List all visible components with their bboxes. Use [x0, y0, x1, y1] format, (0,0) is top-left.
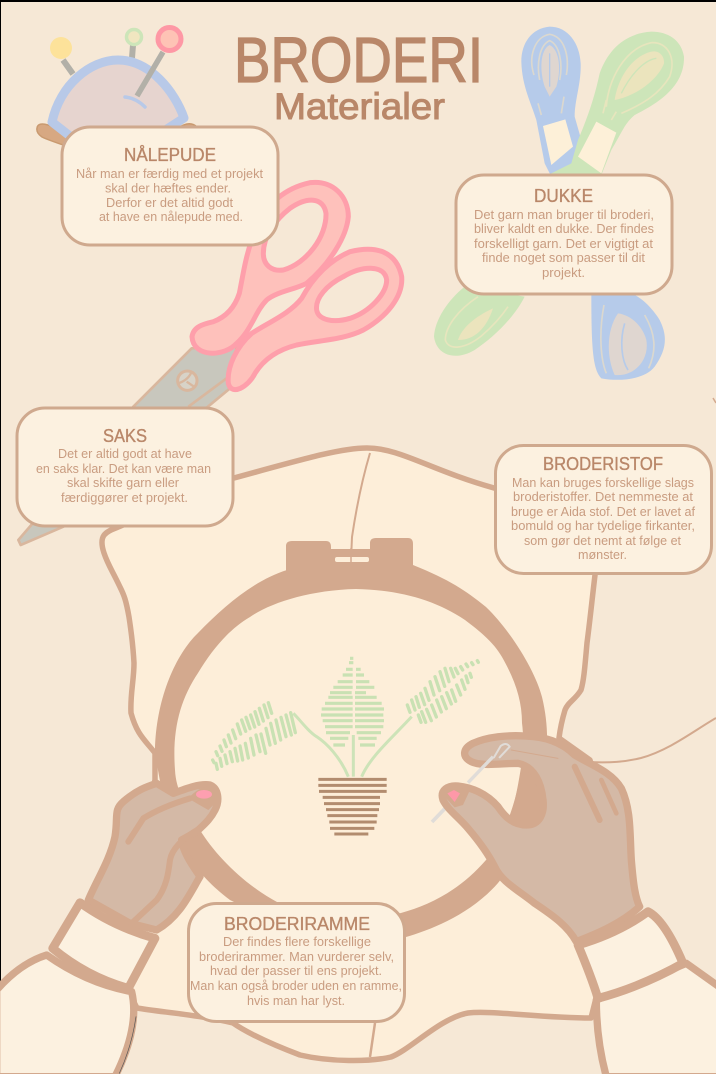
- panel: nålepude: [62, 127, 278, 245]
- text: broderistof description: bomuld og har tydelige firkanter,: [511, 519, 695, 533]
- pink fingernail: [447, 790, 460, 802]
- yellow pin: [63, 60, 73, 74]
- right sleeve: [596, 963, 716, 1074]
- panel: saks: [17, 408, 233, 526]
- centre leaf: [321, 658, 384, 745]
- illustration: pincushion: [37, 28, 197, 148]
- left hand: [88, 783, 218, 930]
- text: saks description: [36, 447, 211, 505]
- text: broderistof description: mønster.: [578, 548, 627, 562]
- right hand: [442, 736, 640, 942]
- heading: saks: SAKS: [103, 426, 147, 446]
- heading: broderiramme: BRODERIRAMME: [224, 914, 370, 934]
- blue skein bottom: [591, 295, 665, 380]
- illustration: left hand with cuff and sleeve: [0, 783, 218, 1074]
- heading: broderistof: BRODERISTOF: [543, 454, 663, 474]
- panel: broderistof: [496, 446, 712, 574]
- text: dukke description: forskelligt garn. Det er vigtigt at: [474, 237, 654, 251]
- text: saks description: skal skifte garn eller: [67, 476, 179, 490]
- illustration: embroidery hoop: [155, 538, 547, 942]
- right cuff: [578, 912, 683, 998]
- text: broderiramme description: Man kan også broder uden en ramme,: [190, 979, 402, 993]
- title: Broderi: BRODERI: [234, 24, 483, 96]
- panel: broderiramme: [188, 904, 404, 1022]
- scissor blades: [18, 347, 237, 545]
- title: [234, 24, 483, 127]
- heading: dukke: DUKKE: [534, 186, 593, 206]
- scissor handles: [192, 182, 402, 390]
- illustration: embroidery floss skeins: [434, 27, 684, 380]
- text: dukke description: [474, 208, 654, 280]
- text: broderistof description: som gør det nemt at følge et: [524, 534, 682, 548]
- needle tip: [432, 806, 447, 822]
- heading: nålepude: NÅLEPUDE: [124, 145, 216, 165]
- left frond: [213, 703, 295, 769]
- text: dukke description: projekt.: [542, 266, 585, 280]
- scissor screw: [178, 371, 197, 390]
- text: saks description: Det er altid godt at have: [58, 447, 192, 461]
- text: dukke description: bliver kaldt en dukke. Der findes: [474, 222, 654, 236]
- text: broderiramme description: broderirammer. Man vurderer selv,: [199, 950, 394, 964]
- cushion base: [37, 124, 197, 148]
- text: dukke description: Det garn man bruger til broderi,: [474, 208, 654, 222]
- hoop section between fingers: [511, 765, 546, 828]
- cushion dome: [52, 60, 184, 140]
- text: broderistof description: broderistoffer. Det nemmeste at: [513, 490, 694, 504]
- green skein top: [548, 32, 684, 175]
- needle shaft and eye: [468, 757, 493, 783]
- left cuff: [53, 903, 155, 988]
- text: dukke description: finde noget som passer til dit: [482, 251, 646, 265]
- illustration: embroidered plant: [213, 658, 478, 834]
- subtitle: Materialer: Materialer: [274, 86, 445, 127]
- illustration: embroidery fabric: [102, 398, 716, 1061]
- text: nålepude description: skal der hæftes ender.: [105, 182, 231, 196]
- text: broderistof description: Man kan bruges forskellige slags: [512, 476, 694, 490]
- text: broderiramme description: hvis man har lyst.: [247, 994, 345, 1008]
- text: broderistof description: bruge er Aida stof. Det er lavet af: [511, 505, 696, 519]
- text: saks description: færdiggører et projekt.: [61, 491, 188, 505]
- text: nålepude description: [76, 167, 264, 224]
- text: nålepude description: Når man er færdig med et projekt: [76, 167, 264, 181]
- right frond: [407, 661, 478, 722]
- plant pot: [318, 779, 387, 834]
- illustration: scissors: [18, 182, 402, 545]
- pink fingernail: [196, 790, 212, 799]
- plant stems: [293, 713, 412, 777]
- text: saks description: en saks klar. Det kan være man: [36, 462, 211, 476]
- panel: dukke: [456, 175, 672, 294]
- text: broderiramme description: [190, 935, 402, 1008]
- text: nålepude description: Derfor er det altid godt: [106, 196, 234, 210]
- left sleeve: [0, 955, 134, 1074]
- text: broderiramme description: Der findes flere forskellige: [223, 935, 371, 949]
- blue skein top: [521, 27, 591, 177]
- text: nålepude description: at have en nålepude med.: [99, 210, 243, 224]
- pink pin: [137, 52, 163, 96]
- text: broderistof description: [511, 476, 696, 562]
- text: broderiramme description: hvad der passer til ens projekt.: [210, 964, 382, 978]
- illustration: right hand with needle: [432, 736, 716, 1074]
- green pin: [132, 45, 133, 58]
- green skein bottom: [434, 287, 525, 356]
